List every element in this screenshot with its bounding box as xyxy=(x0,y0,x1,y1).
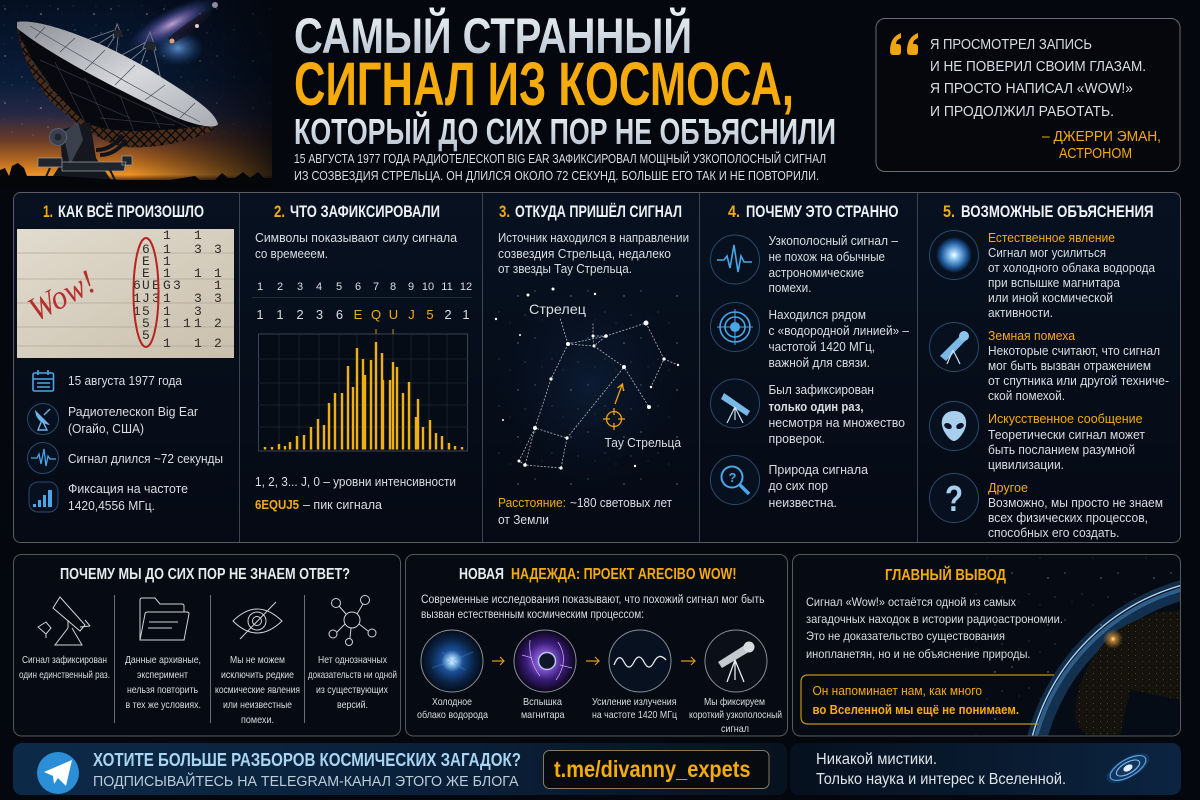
title: КОТОРЫЙ ДО СИХ ПОР НЕ ОБЪЯСНИЛИ xyxy=(294,110,836,152)
panel: why we still do not know: космические явления xyxy=(215,684,300,696)
panel: why we still do not know: или неизвестные xyxy=(223,699,292,711)
icon: alien xyxy=(930,402,978,450)
signal table: 5 xyxy=(336,281,342,293)
photo: printout with Wow!: G xyxy=(163,278,171,293)
arrow xyxy=(681,657,695,665)
photo: printout with Wow!: 1 xyxy=(194,336,202,351)
column 3: where it came from: созвездия Стрельца, недалеко xyxy=(498,247,671,261)
signal table: 6 xyxy=(355,281,361,293)
column 5: possible explanations: способных его создать. xyxy=(988,526,1120,540)
column 1: how it happened: КАК ВСЁ ПРОИЗОШЛО xyxy=(58,202,204,221)
column 3: where it came from: Источник находился в направлении xyxy=(498,231,689,245)
column 5: possible explanations: ской помехой. xyxy=(988,389,1065,403)
signal table: 1 xyxy=(257,281,263,293)
banner: telegram call to action: ХОТИТЕ БОЛЬШЕ РАЗБОРОВ КОСМИЧЕСКИХ ЗАГАДОК? xyxy=(93,750,521,770)
icon: question mark: ? xyxy=(945,478,963,519)
signal table: 4 xyxy=(316,281,322,293)
quote box: Я ПРОСМОТРЕЛ ЗАПИСЬ xyxy=(930,36,1092,53)
photo: printout with Wow!: 5 xyxy=(142,328,150,343)
photo: printout with Wow!: 3 xyxy=(194,242,202,257)
column 5: possible explanations: при вспышке магнитара xyxy=(988,276,1120,290)
column 2: what was recorded: со времееем. xyxy=(255,246,328,261)
icon: magnifier question xyxy=(710,456,760,504)
photo: printout with Wow!: 3 xyxy=(214,242,222,257)
panel: new hope, Arecibo WOW: Мы фиксируем xyxy=(704,696,765,708)
icon: telescope xyxy=(710,379,760,428)
column 5: possible explanations: от холодного облака водорода xyxy=(988,261,1155,275)
signal table: 1 xyxy=(256,307,264,322)
column 3: where it came from: ОТКУДА ПРИШЁЛ СИГНАЛ xyxy=(515,202,682,221)
panel: why we still do not know: Данные архивные, xyxy=(125,654,201,666)
quote box xyxy=(876,18,1180,172)
column 1: how it happened: (Огайо, США) xyxy=(68,421,144,436)
photo: printout with Wow!: 1 xyxy=(194,266,202,281)
photo: printout with Wow!: 1 xyxy=(163,304,171,319)
photo: printout with Wow!: 1 xyxy=(163,291,171,306)
photo: printout with Wow!: 1 xyxy=(194,316,202,331)
photo: printout with Wow!: 5 xyxy=(142,304,150,319)
panel: why we still do not know: доказательств ни одной xyxy=(308,669,397,681)
icon: spiral galaxy xyxy=(1102,747,1154,789)
photo: printout with Wow!: 6 xyxy=(133,278,141,293)
column 5: possible explanations: Возможно, мы просто не знаем xyxy=(988,496,1163,510)
photo: printout with Wow!: 2 xyxy=(214,316,222,331)
column 3: where it came from: Расстояние: xyxy=(498,495,566,510)
link box: t.me/divanny_expets xyxy=(554,756,750,782)
photo: printout with Wow!: 1 xyxy=(163,336,171,351)
title: СИГНАЛ ИЗ КОСМОСА, xyxy=(294,50,794,118)
signal table: J xyxy=(408,307,415,322)
signal table: 7 xyxy=(373,281,379,293)
signal table: 2 xyxy=(444,307,452,322)
column 5: possible explanations: от спутника или другой техниче- xyxy=(988,374,1169,388)
icon: target xyxy=(710,302,760,352)
column 4: why it is strange: не похож на обычные xyxy=(768,249,885,264)
constellation map: Тау Стрельца xyxy=(604,435,682,450)
signal table xyxy=(252,281,472,322)
panel: why we still do not know: версий. xyxy=(337,699,368,711)
subtitle: 15 АВГУСТА 1977 ГОДА РАДИОТЕЛЕСКОП BIG EAR ЗАФИКСИРОВАЛ МОЩНЫЙ УЗКОПОЛОСНЫЙ СИГНАЛ xyxy=(294,151,826,166)
photo: printout with Wow!: 1 xyxy=(194,228,202,243)
photo: printout with Wow!: 1 xyxy=(163,254,171,269)
column 1: how it happened: Радиотелескоп Big Ear xyxy=(68,404,199,419)
column 5: possible explanations: всех физических процессов, xyxy=(988,511,1148,525)
link box xyxy=(544,750,769,788)
panel: new hope, Arecibo WOW: облако водорода xyxy=(417,709,488,721)
signal table: 3 xyxy=(297,281,303,293)
panel: new hope, Arecibo WOW: короткий узкополосный xyxy=(689,709,782,721)
panel: new hope, Arecibo WOW: магнитара xyxy=(521,709,565,721)
photo: printout with Wow!: 3 xyxy=(173,278,181,293)
callout xyxy=(801,675,1054,724)
photo: printout with Wow!: 3 xyxy=(214,291,222,306)
icon: glowing star xyxy=(930,230,978,280)
column 4: why it is strange: несмотря на множество xyxy=(768,415,905,430)
column 2: what was recorded: 1, 2, 3... J, 0 – уровни интенсивности xyxy=(255,474,456,489)
photo: printout with Wow!: E xyxy=(142,254,150,269)
panel: why we still do not know: нельзя повторить xyxy=(127,684,198,696)
photo: printout with Wow!: 1 xyxy=(214,278,222,293)
icon: magnetar flash xyxy=(514,630,576,692)
panel: main takeaway: инопланетян, но и не объяснение природы. xyxy=(806,647,1030,661)
column 4: why it is strange: помехи. xyxy=(768,280,812,295)
quote box: – ДЖЕРРИ ЭМАН, xyxy=(1042,128,1161,145)
panel: why we still do not know: помехи. xyxy=(241,714,274,726)
column 3: where it came from: 3. xyxy=(499,202,510,221)
panel: new hope, Arecibo WOW: Вспышка xyxy=(523,696,562,708)
column 2: what was recorded: 2. xyxy=(274,202,285,221)
panel: new hope, Arecibo WOW: Современные исследования показывают, что похожий сигнал мог быть xyxy=(421,594,765,606)
quote box: И ПРОДОЛЖИЛ РАБОТАТЬ. xyxy=(930,103,1114,120)
column 1: how it happened xyxy=(17,202,234,513)
dish underside xyxy=(17,26,216,147)
quote box: И НЕ ПОВЕРИЛ СВОИМ ГЛАЗАМ. xyxy=(930,58,1146,75)
column 4: why it is strange: ПОЧЕМУ ЭТО СТРАННО xyxy=(746,202,898,221)
quote box: Я ПРОСТО НАПИСАЛ «WOW!» xyxy=(930,80,1133,97)
signal table: 11 xyxy=(441,281,453,293)
column 4: why it is strange: Узкополосный сигнал – xyxy=(768,233,899,248)
column 4: why it is strange: 4. xyxy=(728,202,740,221)
banner: telegram call to action: Только наука и интерес к Вселенной. xyxy=(816,771,1066,788)
icon: folder xyxy=(140,598,189,640)
column 5: possible explanations: цивилизации. xyxy=(988,458,1064,472)
panel: why we still do not know: Нет однозначных xyxy=(318,654,388,666)
column 5: possible explanations: мог быть вызван отражением xyxy=(988,359,1151,373)
column 5: possible explanations xyxy=(930,202,1169,540)
signal table: 1 xyxy=(276,307,284,322)
treeline xyxy=(0,163,272,190)
icon: network xyxy=(329,596,376,646)
column 4: why it is strange: Находился рядом xyxy=(768,307,866,322)
title: САМЫЙ СТРАННЫЙ xyxy=(294,7,692,64)
column 4: why it is strange: Был зафиксирован xyxy=(768,382,874,397)
milky way xyxy=(121,0,223,66)
subtitle: ИЗ СОЗВЕЗДИЯ СТРЕЛЬЦА. ОН ДЛИЛСЯ ОКОЛО 72 СЕКУНД. БОЛЬШЕ ЕГО ТАК И НЕ ПОВТОРИЛИ. xyxy=(294,168,819,183)
column 2: what was recorded: 6EQUJ5 xyxy=(255,497,299,512)
callout: во Вселенной мы ещё не понимаем. xyxy=(812,702,1019,717)
icon: waveform xyxy=(28,442,58,474)
signal table: 12 xyxy=(460,281,472,293)
panel: why we still do not know: в тех же условиях. xyxy=(126,699,201,711)
column 4: why it is strange xyxy=(710,202,910,510)
signal table: 3 xyxy=(316,307,323,322)
panel: new hope, Arecibo WOW: вызван естественным космическим процессом: xyxy=(421,609,644,621)
column 4: why it is strange: только один раз, xyxy=(768,399,864,414)
signal table: 6 xyxy=(336,307,343,322)
column 4: why it is strange: важной для связи. xyxy=(768,355,870,370)
dish surface xyxy=(17,22,218,126)
photo: printout with Wow!: U xyxy=(142,278,150,293)
panel: new hope, Arecibo WOW: НОВАЯ xyxy=(459,566,504,583)
column 5: possible explanations: Сигнал мог усилиться xyxy=(988,246,1106,260)
arrow xyxy=(586,657,599,665)
panel: why we still do not know: ПОЧЕМУ МЫ ДО СИХ ПОР НЕ ЗНАЕМ ОТВЕТ? xyxy=(60,566,350,583)
photo: printout with Wow!: E xyxy=(152,278,160,293)
constellation map xyxy=(490,280,682,490)
column 3: where it came from: от звезды Тау Стрельца. xyxy=(498,262,632,276)
quote box: АСТРОНОМ xyxy=(1059,145,1132,162)
icon: telescope in circle xyxy=(705,630,767,692)
arrow xyxy=(492,657,504,665)
icon: target Tau Sagittarii xyxy=(603,408,625,430)
panel: new hope, Arecibo WOW: НАДЕЖДА: ПРОЕКТ ARECIBO WOW! xyxy=(511,566,736,583)
column 5: possible explanations: Искусственное сообщение xyxy=(988,412,1143,426)
photo: printout with Wow!: 1 xyxy=(163,228,171,243)
panel: new hope, Arecibo WOW: Холодное xyxy=(432,696,472,708)
column 2: what was recorded: – пик сигнала xyxy=(303,497,383,512)
icon: waveform xyxy=(710,235,760,284)
column 2: what was recorded: ЧТО ЗАФИКСИРОВАЛИ xyxy=(290,202,440,221)
photo: printout with Wow!: 1 xyxy=(133,304,141,319)
icon: telescope xyxy=(930,322,978,372)
icon: crossed eye xyxy=(233,602,282,639)
column 3: where it came from: от Земли xyxy=(498,512,549,527)
icon: question mark xyxy=(930,474,978,522)
icon: radio wave xyxy=(609,630,671,692)
signal table: 5 xyxy=(426,307,434,322)
icon: signal bars xyxy=(29,482,58,512)
icon: quotation mark xyxy=(890,33,918,55)
photo: printout with Wow!: 1 xyxy=(214,266,222,281)
photo: printout with Wow!: 3 xyxy=(152,291,160,306)
main panel with five columns xyxy=(14,192,1180,542)
column 2: what was recorded: Символы показывают силу сигнала xyxy=(255,230,458,245)
signal table: 10 xyxy=(422,281,434,293)
panel: main takeaway: Это не доказательство существования xyxy=(806,629,1005,643)
signal table: 2 xyxy=(296,307,304,322)
photo: printout with Wow!: 3 xyxy=(194,291,202,306)
column 3: where it came from xyxy=(490,202,689,527)
panel: why we still do not know xyxy=(14,554,400,736)
banner: telegram call to action: ПОДПИСЫВАЙТЕСЬ НА TELEGRAM-КАНАЛ ЭТОГО ЖЕ БЛОГА xyxy=(93,772,518,790)
icon: telescope outline xyxy=(38,597,90,645)
signal table: E xyxy=(354,307,363,322)
title xyxy=(294,7,836,152)
panel: main takeaway: ГЛАВНЫЙ ВЫВОД xyxy=(885,565,1006,584)
column 5: possible explanations: активности. xyxy=(988,306,1053,320)
panel: why we still do not know: один единственный раз. xyxy=(19,669,110,681)
subtitle xyxy=(294,151,826,183)
column 5: possible explanations: или иной космической xyxy=(988,291,1113,305)
banner: telegram call to action: Никакой мистики. xyxy=(816,751,937,768)
photo: printout with Wow! xyxy=(17,228,234,358)
column 4: why it is strange: частотой 1420 МГц, xyxy=(768,339,875,354)
panel: new hope, Arecibo WOW xyxy=(406,554,788,736)
photo: printout with Wow!: E xyxy=(142,266,150,281)
panel: why we still do not know: исключить редкие xyxy=(221,669,294,681)
icon: cold hydrogen cloud xyxy=(421,630,483,692)
panel: new hope, Arecibo WOW: на частоте 1420 МГц xyxy=(592,709,677,721)
column 4: why it is strange: неизвестна. xyxy=(768,495,837,510)
column 5: possible explanations: 5. xyxy=(943,202,955,221)
column 4: why it is strange: с «водородной линией» – xyxy=(768,323,910,338)
panel: why we still do not know: Мы не можем xyxy=(230,654,285,666)
feed towers xyxy=(86,24,162,84)
column 1: how it happened: 1. xyxy=(43,202,53,221)
bar chart xyxy=(258,329,468,451)
column 4: why it is strange: проверок. xyxy=(768,431,825,446)
column 1: how it happened: Фиксация на частоте xyxy=(68,481,188,496)
column 3: where it came from: ~180 световых лет xyxy=(570,495,672,510)
column 4: why it is strange: Природа сигнала xyxy=(768,462,869,477)
signal table: 1 xyxy=(462,307,470,322)
column 4: why it is strange: астрономические xyxy=(768,265,864,280)
photo: printout with Wow!: 1 xyxy=(163,316,171,331)
photo: printout with Wow!: 3 xyxy=(194,304,202,319)
photo: printout with Wow!: 1 xyxy=(163,242,171,257)
callout: Он напоминает нам, как много xyxy=(812,683,982,698)
header photo: radio telescope at dusk xyxy=(0,0,272,190)
icon: dish xyxy=(28,404,58,434)
earth illustration xyxy=(960,556,1181,736)
panel: main takeaway: Сигнал «Wow!» остаётся одной из самых xyxy=(806,595,1016,609)
column 5: possible explanations: Другое xyxy=(988,481,1028,495)
panel: why we still do not know: из существующих xyxy=(316,684,389,696)
column 5: possible explanations: Теоретически сигнал может xyxy=(988,428,1145,442)
column 5: possible explanations: Естественное явление xyxy=(988,231,1115,245)
signal table: Q xyxy=(371,307,381,322)
photo: printout with Wow!: 2 xyxy=(214,336,222,351)
column 5: possible explanations: Некоторые считают, что сигнал xyxy=(988,344,1160,358)
constellation map: Стрелец xyxy=(529,301,586,317)
panel: new hope, Arecibo WOW: сигнал xyxy=(721,723,749,735)
signal table: U xyxy=(389,307,398,322)
icon: calendar xyxy=(33,370,54,391)
column 5: possible explanations: Земная помеха xyxy=(988,329,1075,343)
photo: printout with Wow!: 6 xyxy=(142,242,150,257)
column 1: how it happened: 15 августа 1977 года xyxy=(68,373,183,388)
signal table: 9 xyxy=(408,281,414,293)
telescope mount xyxy=(44,122,118,190)
photo: printout with Wow!: 1 xyxy=(133,291,141,306)
column 1: how it happened: Сигнал длился ~72 секунды xyxy=(68,451,223,466)
banner: telegram call to action xyxy=(13,743,1181,795)
panel: main takeaway: загадочных находок в истории радиоастрономии. xyxy=(806,612,1063,626)
icon: magnifier question: ? xyxy=(728,470,736,485)
arrow xyxy=(615,384,624,404)
column 1: how it happened: 1420,4556 МГц. xyxy=(68,498,155,513)
icon: telegram xyxy=(37,752,79,794)
panel: why we still do not know: эксперимент xyxy=(137,669,188,681)
column 5: possible explanations: быть посланием разумной xyxy=(988,443,1135,457)
column 2: what was recorded xyxy=(252,202,472,512)
photo: printout with Wow!: J xyxy=(142,291,150,306)
photo: printout with Wow!: 1 xyxy=(183,316,191,331)
panel: new hope, Arecibo WOW: Усиление излучения xyxy=(592,696,676,708)
panel: main takeaway xyxy=(792,554,1181,736)
panel: why we still do not know: Сигнал зафиксирован xyxy=(22,654,107,666)
column 4: why it is strange: до сих пор xyxy=(768,478,828,493)
signal table: 2 xyxy=(277,281,283,293)
photo: printout with Wow!: Wow! xyxy=(22,264,102,329)
signal table: 8 xyxy=(390,281,396,293)
photo: printout with Wow!: 5 xyxy=(142,316,150,331)
photo: printout with Wow!: 1 xyxy=(163,266,171,281)
